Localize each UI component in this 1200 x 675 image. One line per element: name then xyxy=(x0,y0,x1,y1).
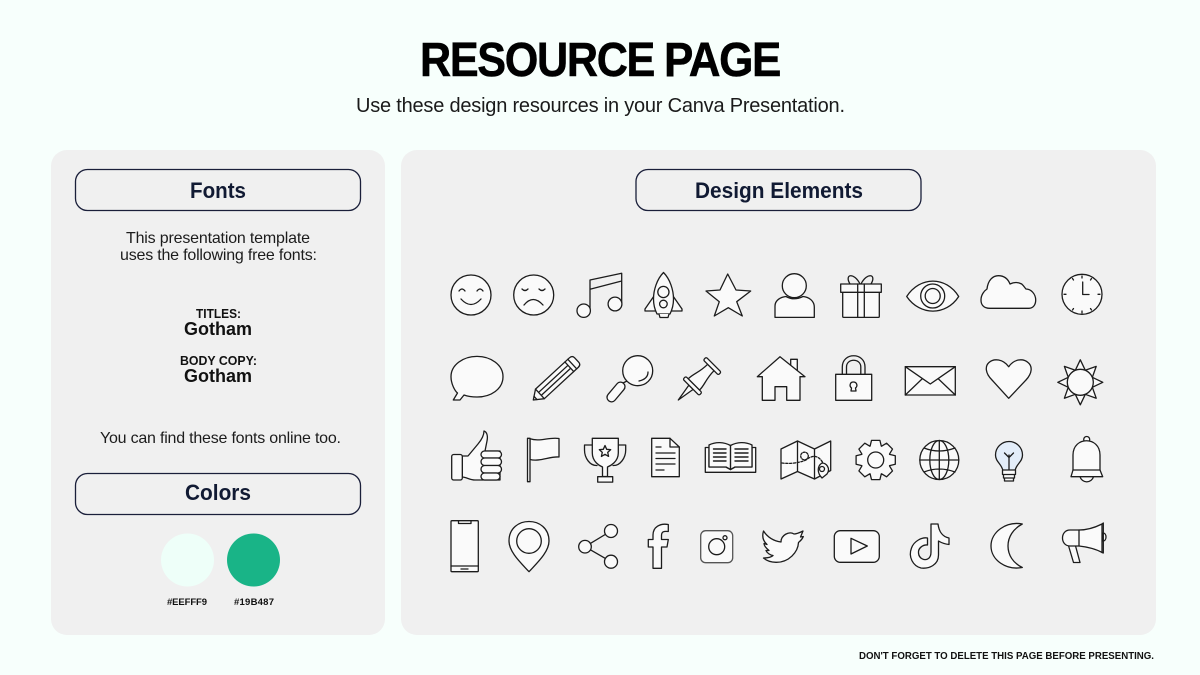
icon: smartphone xyxy=(451,521,478,572)
fonts intro text: uses the following free fonts: xyxy=(120,247,317,264)
body copy font: BODY COPY: xyxy=(180,353,257,368)
icon: sun xyxy=(1058,360,1103,405)
icon: bell xyxy=(1071,436,1103,482)
heading: fonts: Fonts xyxy=(190,178,246,203)
swatch: 19B487 xyxy=(227,534,280,608)
icon: eye xyxy=(907,281,959,311)
icon: push pin xyxy=(670,357,722,408)
swatch: EEFFF9 xyxy=(161,534,214,608)
heading: fonts xyxy=(76,170,360,210)
icon: sad face xyxy=(514,275,554,315)
icon: youtube xyxy=(834,531,879,562)
icon: padlock xyxy=(836,356,872,400)
icon: flag xyxy=(528,438,559,482)
swatch: EEFFF9: #EEFFF9 xyxy=(167,597,207,608)
icon: star xyxy=(706,274,751,316)
icon: gift xyxy=(841,276,881,317)
icon: thumbs up xyxy=(452,431,502,480)
body copy font: Gotham xyxy=(184,365,252,386)
icon: facebook xyxy=(648,524,668,568)
icon: moon xyxy=(991,524,1022,568)
icon: rocket xyxy=(645,272,682,318)
title: PAGE xyxy=(664,34,780,87)
icon: globe xyxy=(920,440,959,480)
icon: speech bubble xyxy=(451,356,503,400)
icon: open book xyxy=(705,443,756,472)
icon: document xyxy=(652,438,679,477)
icon: folded map xyxy=(781,441,831,479)
icon: tiktok xyxy=(910,524,949,568)
icon: gear xyxy=(856,440,895,480)
titles font xyxy=(184,306,252,339)
icon: envelope xyxy=(905,367,955,395)
icon: cloud xyxy=(981,276,1036,308)
titles font: TITLES: xyxy=(196,306,241,321)
icon: smiley xyxy=(451,275,491,315)
icon: heart xyxy=(986,360,1031,398)
icon: magnifier xyxy=(605,356,653,404)
icon: clock xyxy=(1062,274,1102,314)
icon: person xyxy=(775,274,814,317)
body copy font xyxy=(180,353,257,386)
heading: colors xyxy=(76,474,360,514)
fonts intro text xyxy=(120,230,317,264)
swatch: 19B487: #19B487 xyxy=(234,597,274,608)
footer reminder: DON'T FORGET TO DELETE THIS PAGE BEFORE PRESENTING. xyxy=(859,651,1154,662)
icon: house xyxy=(757,357,805,400)
subtitle: Use these design resources in your Canva Presentation. xyxy=(356,95,845,117)
icon: twitter xyxy=(763,531,803,562)
panel: design elements xyxy=(401,150,1156,635)
icon: share xyxy=(579,524,618,568)
icon: light bulb xyxy=(995,442,1022,481)
icon: location pin xyxy=(509,522,549,572)
heading: design elements: Design Elements xyxy=(695,178,863,203)
titles font: Gotham xyxy=(184,318,252,339)
panel: fonts and colors xyxy=(51,150,385,635)
heading: design elements xyxy=(636,170,921,210)
heading: colors: Colors xyxy=(185,480,251,505)
icon: music note xyxy=(577,273,622,317)
fonts intro text: This presentation template xyxy=(126,230,310,247)
icon: pencil xyxy=(529,355,581,405)
icon: instagram xyxy=(701,531,733,563)
fonts note: You can find these fonts online too. xyxy=(100,430,341,447)
title: RESOURCE xyxy=(420,34,654,87)
icon: trophy xyxy=(584,438,626,482)
icon: megaphone xyxy=(1062,523,1106,562)
